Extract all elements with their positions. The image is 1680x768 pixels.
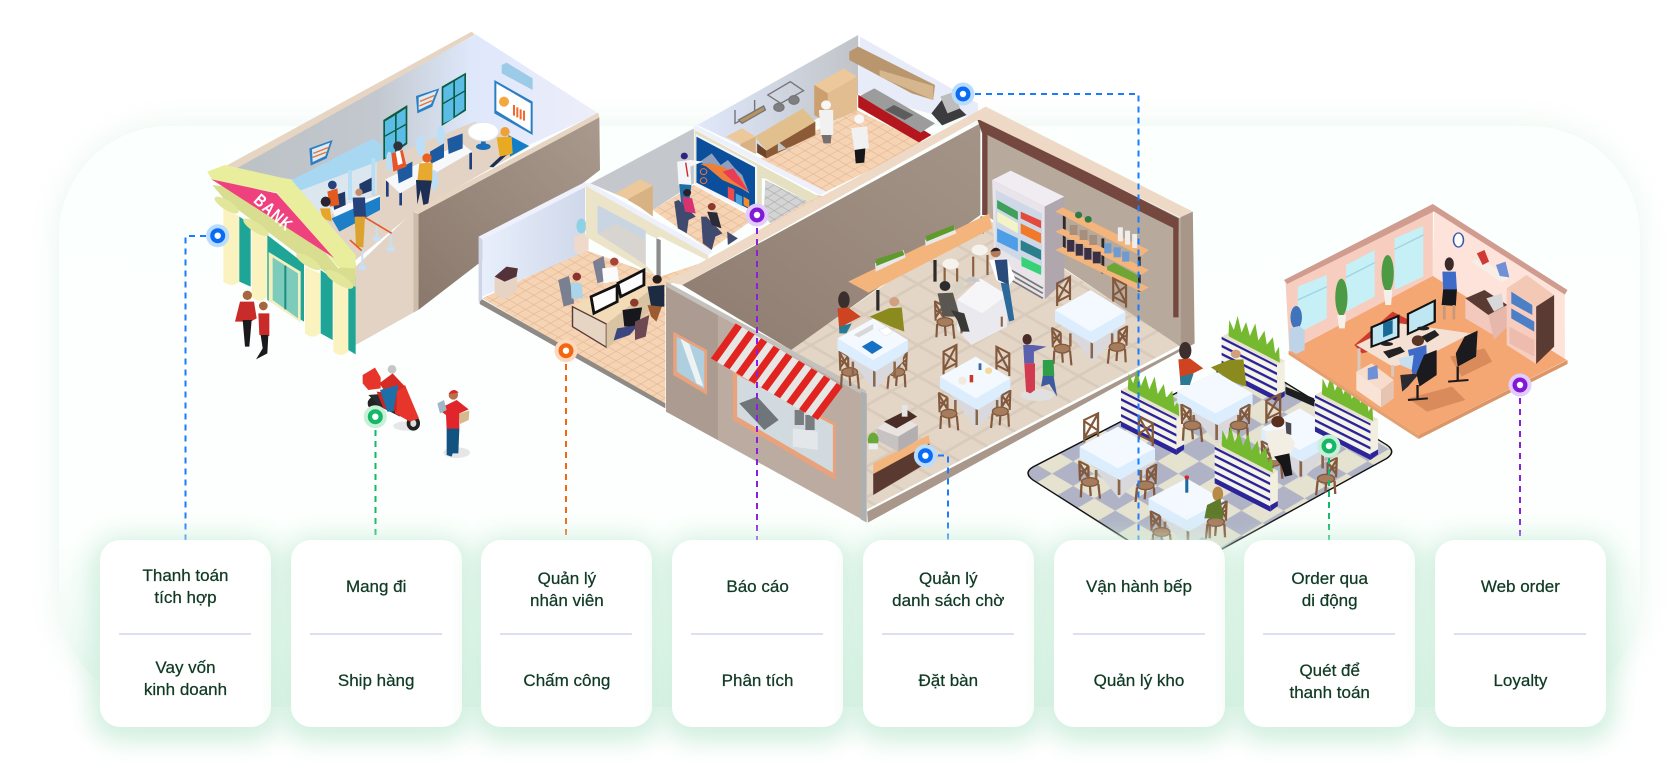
- card: mobile order: [1244, 540, 1415, 727]
- blue payment connector: [186, 236, 206, 540]
- waiter table with diner: [935, 277, 1007, 345]
- interior back wall: [982, 120, 1180, 347]
- meeting room floor: [653, 185, 755, 250]
- BANK label: BANK: [250, 191, 296, 236]
- label: kitchen operations: Vận hành bếp: [1086, 577, 1192, 596]
- marker: web order: [1508, 374, 1532, 396]
- employee at desk: [1398, 335, 1427, 392]
- patio plate: [1027, 361, 1392, 575]
- bar shelf: [848, 213, 992, 311]
- office desk: [1356, 323, 1471, 407]
- label: table booking: Đặt bàn: [919, 671, 978, 690]
- receptionist on phone: [1442, 257, 1457, 319]
- label: web order: Web order: [1481, 577, 1560, 596]
- meeting cabinet: [615, 179, 653, 217]
- label: takeaway: Mang đi: [346, 577, 406, 596]
- card: payment and loans: [100, 540, 271, 727]
- blue waitlist connector: [938, 456, 948, 540]
- bank floor: [292, 122, 530, 260]
- staff desk: [572, 277, 655, 348]
- red partition: [1354, 312, 1416, 353]
- presenter: [677, 153, 703, 207]
- water cooler: [574, 219, 589, 255]
- kitchen floor: [758, 110, 924, 192]
- label: staff management: [530, 569, 604, 610]
- label: scan to pay: [1290, 661, 1370, 702]
- background panel: [59, 126, 1640, 707]
- label: reports: Báo cáo: [726, 577, 789, 596]
- notice boards: [309, 88, 439, 166]
- bank side wall: [475, 34, 598, 146]
- marker: kitchen: [952, 82, 974, 106]
- blue kitchen connector: [975, 94, 1138, 540]
- drinks fridge: [992, 171, 1064, 299]
- card: reports: [672, 540, 843, 727]
- label: integrated payment: [142, 566, 228, 607]
- office workers: [391, 141, 433, 205]
- striped awning: [711, 323, 843, 420]
- room left wall: [1286, 207, 1433, 352]
- partition between meeting room and kitchen: [692, 125, 826, 220]
- marker: payment: [206, 224, 229, 247]
- dining tables: [837, 290, 1127, 430]
- label: waitlist: danh sách chờ: [892, 591, 1004, 610]
- waiter: [989, 248, 1015, 322]
- label: inventory: Quản lý kho: [1094, 671, 1184, 690]
- purple web order connector: [1519, 398, 1521, 537]
- bank wall top edges: [223, 32, 599, 214]
- marker: staff: [554, 339, 578, 362]
- room windows: [1298, 226, 1423, 333]
- label: waitlist: Quản lý: [919, 569, 978, 588]
- room floor: [1289, 275, 1567, 435]
- low front wall: [867, 343, 1195, 523]
- label: integrated payment: tích hợp: [154, 588, 217, 607]
- label: staff management: nhân viên: [530, 591, 604, 610]
- room right wall: [1433, 210, 1565, 358]
- patio tables and chairs: [1079, 372, 1337, 502]
- wall clock: [1453, 233, 1463, 247]
- black office chairs: [1408, 331, 1478, 400]
- floor shadows: [1408, 348, 1492, 412]
- card: takeaway and shipping: [291, 540, 462, 727]
- marker: delivery: [364, 405, 387, 428]
- partition with opening: [586, 182, 713, 277]
- purple report connector: [756, 228, 758, 540]
- photocopier: [495, 267, 518, 299]
- restaurant floor: [789, 217, 1180, 509]
- office chairs and employees: [558, 256, 664, 341]
- shop window: [733, 370, 836, 480]
- delivery person: [437, 390, 470, 458]
- teller counter: [332, 178, 380, 232]
- room base: [1289, 351, 1568, 439]
- small office: [1284, 204, 1568, 439]
- green mobile order connector: [1328, 458, 1330, 540]
- label: integrated payment: Thanh toán: [142, 566, 228, 585]
- bank building and street: [207, 32, 600, 458]
- bank staff and customers: [320, 181, 366, 247]
- label: business loan: Vay vốn: [155, 658, 216, 677]
- rear planters: [1121, 316, 1285, 455]
- green delivery connector: [374, 430, 376, 540]
- office wall edges: [479, 182, 665, 408]
- interior left wall: [682, 123, 980, 350]
- marker: report: [746, 204, 768, 226]
- shop front wall: [666, 282, 867, 523]
- label: loyalty: Loyalty: [1493, 671, 1547, 690]
- seated customer on rug: [489, 127, 529, 167]
- red kitchen line: [858, 88, 966, 142]
- marker: waitlist: [914, 444, 937, 467]
- side window: [673, 332, 707, 395]
- back chairs: [944, 277, 1126, 376]
- black bench: [1286, 387, 1314, 407]
- patio back chairs: [1084, 394, 1280, 446]
- label: mobile order: [1291, 569, 1368, 610]
- report dashboard screen: [696, 134, 757, 217]
- right wall end: [1180, 212, 1195, 352]
- staff desks: [385, 133, 472, 205]
- wall chart board: [494, 80, 533, 135]
- wall top edge: [1284, 204, 1568, 295]
- computers: [1372, 301, 1439, 358]
- bank back wall: [230, 35, 475, 200]
- kitchen wall racks: [735, 82, 804, 123]
- restaurant: [666, 107, 1195, 523]
- label: mobile order: di động: [1302, 591, 1358, 610]
- right planter: [1315, 374, 1378, 460]
- seated woman at front table: [1149, 475, 1227, 550]
- bank front wall: [356, 212, 413, 345]
- water dispenser: [1289, 306, 1305, 354]
- outdoor patio: [1027, 316, 1392, 575]
- card: staff management: [481, 540, 652, 727]
- bar stools: [942, 245, 988, 282]
- card: kitchen: [1054, 540, 1224, 727]
- kitchen walls: [697, 35, 978, 153]
- connector lines: [186, 94, 1520, 540]
- label: shipping: Ship hàng: [338, 671, 414, 690]
- columns: [223, 207, 348, 355]
- potted plants: [1335, 255, 1394, 328]
- desktop monitors: [591, 270, 644, 313]
- bank facade: [207, 165, 356, 355]
- bookcase: [1507, 275, 1554, 364]
- pediment: [212, 185, 356, 287]
- round meeting table: [468, 122, 499, 150]
- queue stanchions: [350, 217, 394, 269]
- counter canopy: [292, 138, 382, 220]
- label: waitlist: [892, 569, 1004, 610]
- man with phone: [1262, 416, 1295, 479]
- tan wall tops: [666, 107, 1193, 285]
- chefs: [819, 100, 869, 163]
- handshake diners: [1178, 342, 1246, 387]
- kitchen prep counter: [755, 108, 815, 158]
- mother and child: [1020, 334, 1057, 401]
- pedestrians: [235, 291, 269, 359]
- roof beam: [977, 119, 1179, 317]
- card: waitlist: [863, 540, 1034, 727]
- office back wall: [482, 185, 585, 297]
- air conditioner: [502, 63, 533, 90]
- marker: mobile order: [1318, 434, 1340, 458]
- diners handshake: [837, 291, 904, 333]
- grey tiled corridor: [764, 180, 808, 223]
- delivery scooter and rider: [363, 365, 420, 431]
- wall windows: [383, 73, 466, 160]
- card: web order: [1435, 540, 1606, 727]
- orange staff connector: [565, 364, 567, 537]
- label: scan to pay: Quét để: [1299, 661, 1360, 680]
- wall shelves: [1055, 207, 1149, 292]
- column capitals: [212, 194, 356, 292]
- printer cabinet: [1465, 290, 1507, 340]
- bank wall pillar: [413, 212, 418, 313]
- desk chairs: [386, 126, 445, 190]
- meeting room back wall: [590, 128, 694, 210]
- office floor: [482, 195, 824, 405]
- bank brown exterior wall: [418, 117, 600, 310]
- label: mobile order: Order qua: [1291, 569, 1368, 588]
- label: business loan: kinh doanh: [144, 680, 227, 699]
- front planter: [1215, 426, 1278, 512]
- bank door: [269, 252, 301, 323]
- label: staff management: Quản lý: [538, 569, 596, 588]
- kitchen cabinets: [726, 47, 935, 154]
- wall shelf with binders: [1471, 250, 1509, 283]
- back offices and kitchen: [479, 35, 978, 408]
- teal facade walls: [239, 217, 356, 354]
- table settings: [854, 324, 992, 385]
- label: scan to pay: thanh toán: [1290, 683, 1370, 702]
- label: timekeeping: Chấm công: [523, 671, 610, 690]
- label: analytics: Phân tích: [722, 671, 794, 690]
- service counter: [868, 405, 930, 495]
- label: business loan: [144, 658, 227, 699]
- audience seated: [674, 189, 738, 250]
